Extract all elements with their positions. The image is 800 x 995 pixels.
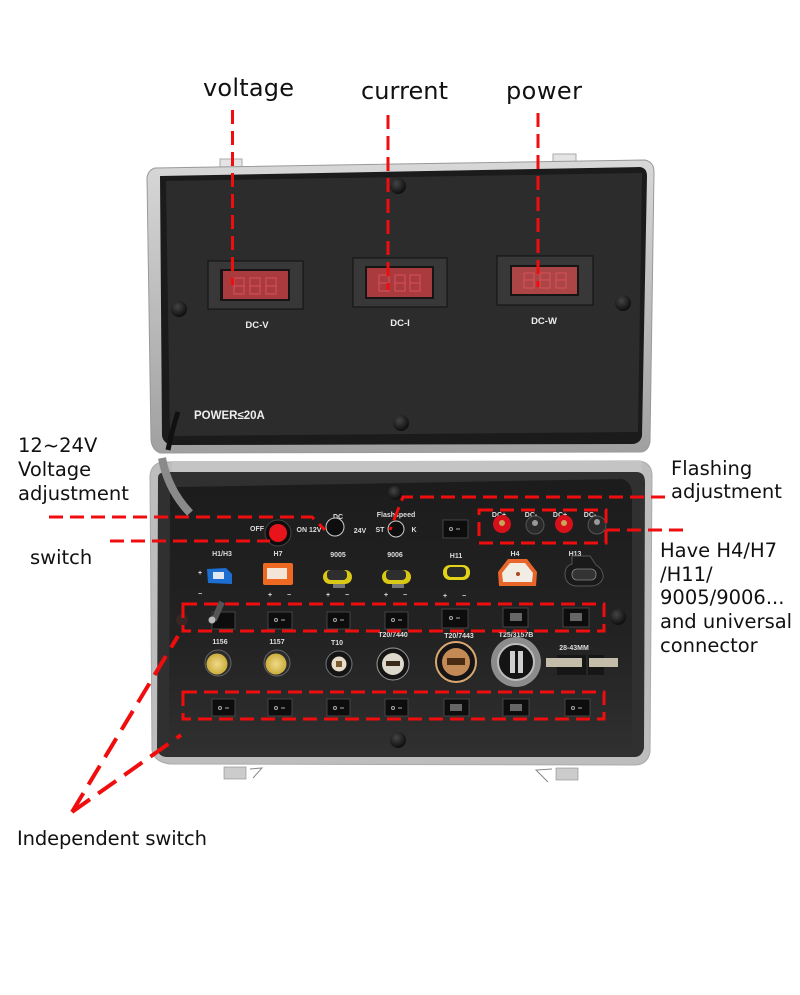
meter: DC-W xyxy=(497,256,593,327)
connector: 9005: − xyxy=(345,592,349,599)
callout box: bottom switch row xyxy=(183,692,604,719)
socket: T20/7440 xyxy=(377,632,409,680)
label: independent switch: Independent switch xyxy=(17,827,207,850)
connector: H13: H13 xyxy=(569,551,582,558)
connector: 9006 xyxy=(382,552,411,599)
callout leader: switch xyxy=(110,540,270,542)
socket: T20/7443: T20/7443 xyxy=(444,633,474,640)
voltage knob: ON 12V xyxy=(297,527,322,534)
top case lid xyxy=(147,154,654,453)
connector: 9006: 9006 xyxy=(387,552,403,559)
connector: H7 xyxy=(263,551,293,599)
flash speed knob xyxy=(376,512,417,537)
banana terminals xyxy=(492,512,606,534)
callout leader: voltage adjustment xyxy=(49,517,325,530)
meter: DC-W: DC-W xyxy=(531,316,557,327)
label: connectors: connector xyxy=(660,634,759,657)
fuse terminals 28-43MM xyxy=(546,645,618,675)
bottom switch row xyxy=(212,699,590,716)
voltage knob: DC xyxy=(333,514,343,521)
top panel screws xyxy=(171,178,631,431)
toggle switch and top switch row xyxy=(208,602,589,629)
power rating text: POWER≤20A xyxy=(194,410,265,422)
connector: 9005 xyxy=(323,552,352,599)
connector: H1/H3: + xyxy=(198,570,202,577)
socket: 1157: 1157 xyxy=(269,639,285,646)
connector: H11: + xyxy=(443,593,447,600)
label: switch: switch xyxy=(30,546,92,569)
label: voltage adjustment: Voltage xyxy=(18,458,91,481)
socket: T20/7440: T20/7440 xyxy=(378,632,408,639)
callout box: top switch row xyxy=(183,604,604,631)
socket: 1156: 1156 xyxy=(212,639,228,646)
connector: H11: H11 xyxy=(450,553,462,560)
connector: H11: − xyxy=(462,593,466,600)
label: flashing adjustment: Flashing xyxy=(671,457,752,480)
fuse terminals 28-43MM: 28-43MM xyxy=(559,645,589,652)
power cable xyxy=(162,412,190,513)
callout leader: power xyxy=(536,113,540,287)
label: voltage adjustment: 12~24V xyxy=(18,434,98,457)
connector: 9006: − xyxy=(403,592,407,599)
callout leader: independent switch xyxy=(72,636,181,812)
banana terminals: DC- xyxy=(525,512,538,519)
banana terminals: DC- xyxy=(584,512,597,519)
label: connectors: /H11/ xyxy=(660,563,713,586)
label: flashing adjustment: adjustment xyxy=(671,480,782,503)
connector: H7: − xyxy=(287,592,291,599)
socket: T25/3157B xyxy=(491,632,541,687)
flash speed knob: K xyxy=(411,527,417,534)
main power switch xyxy=(250,520,291,546)
socket: 1156 xyxy=(205,639,231,676)
callout leader: current xyxy=(386,115,390,290)
extra rocker switch xyxy=(443,520,468,538)
label: current: current xyxy=(361,77,448,105)
meter: DC-V: DC-V xyxy=(245,320,269,331)
connector: H4: H4 xyxy=(511,551,520,558)
connector: H13 xyxy=(565,551,603,586)
bottom panel screws xyxy=(176,486,626,748)
socket: T20/7443 xyxy=(436,633,476,682)
banana terminals: DC+ xyxy=(492,512,506,519)
connector: H1/H3 xyxy=(198,551,232,598)
bottom case xyxy=(150,461,652,765)
socket: 1157 xyxy=(264,639,290,676)
label: voltage adjustment: adjustment xyxy=(18,482,129,505)
socket: T10 xyxy=(326,640,352,677)
flash speed knob: Flashspeed xyxy=(377,512,415,519)
voltage knob: 24V xyxy=(354,528,367,535)
meter: DC-I: DC-I xyxy=(390,318,410,329)
main power switch: OFF xyxy=(250,526,265,533)
callout box: banana terminals xyxy=(479,510,606,543)
flash speed knob: ST xyxy=(376,527,385,534)
meter: DC-V xyxy=(208,261,303,331)
callout leader: voltage xyxy=(231,110,234,285)
socket: T10: T10 xyxy=(331,640,343,647)
callout leader: connector xyxy=(606,528,684,532)
connector: H4 xyxy=(498,551,537,586)
connector: H7: H7 xyxy=(274,551,283,558)
banana terminals: DC+ xyxy=(553,512,567,519)
label: connectors: Have H4/H7 xyxy=(660,539,777,562)
voltage knob xyxy=(297,514,367,536)
connector: H7: + xyxy=(268,592,272,599)
socket: T25/3157B: T25/3157B xyxy=(499,632,533,639)
connector: H1/H3: − xyxy=(198,591,202,598)
label: voltage: voltage xyxy=(203,74,294,102)
connector: H1/H3: H1/H3 xyxy=(212,551,232,558)
connector: 9006: + xyxy=(384,592,388,599)
connector: 9005: + xyxy=(326,592,330,599)
label: connectors: 9005/9006... xyxy=(660,586,784,609)
connector: H11 xyxy=(443,553,470,600)
label: connectors: and universal xyxy=(660,610,792,633)
meter: DC-I xyxy=(353,258,447,329)
callout leader: flashing adjustment xyxy=(390,497,665,530)
connector: 9005: 9005 xyxy=(330,552,346,559)
label: power: power xyxy=(506,77,582,105)
case latches xyxy=(224,767,578,782)
